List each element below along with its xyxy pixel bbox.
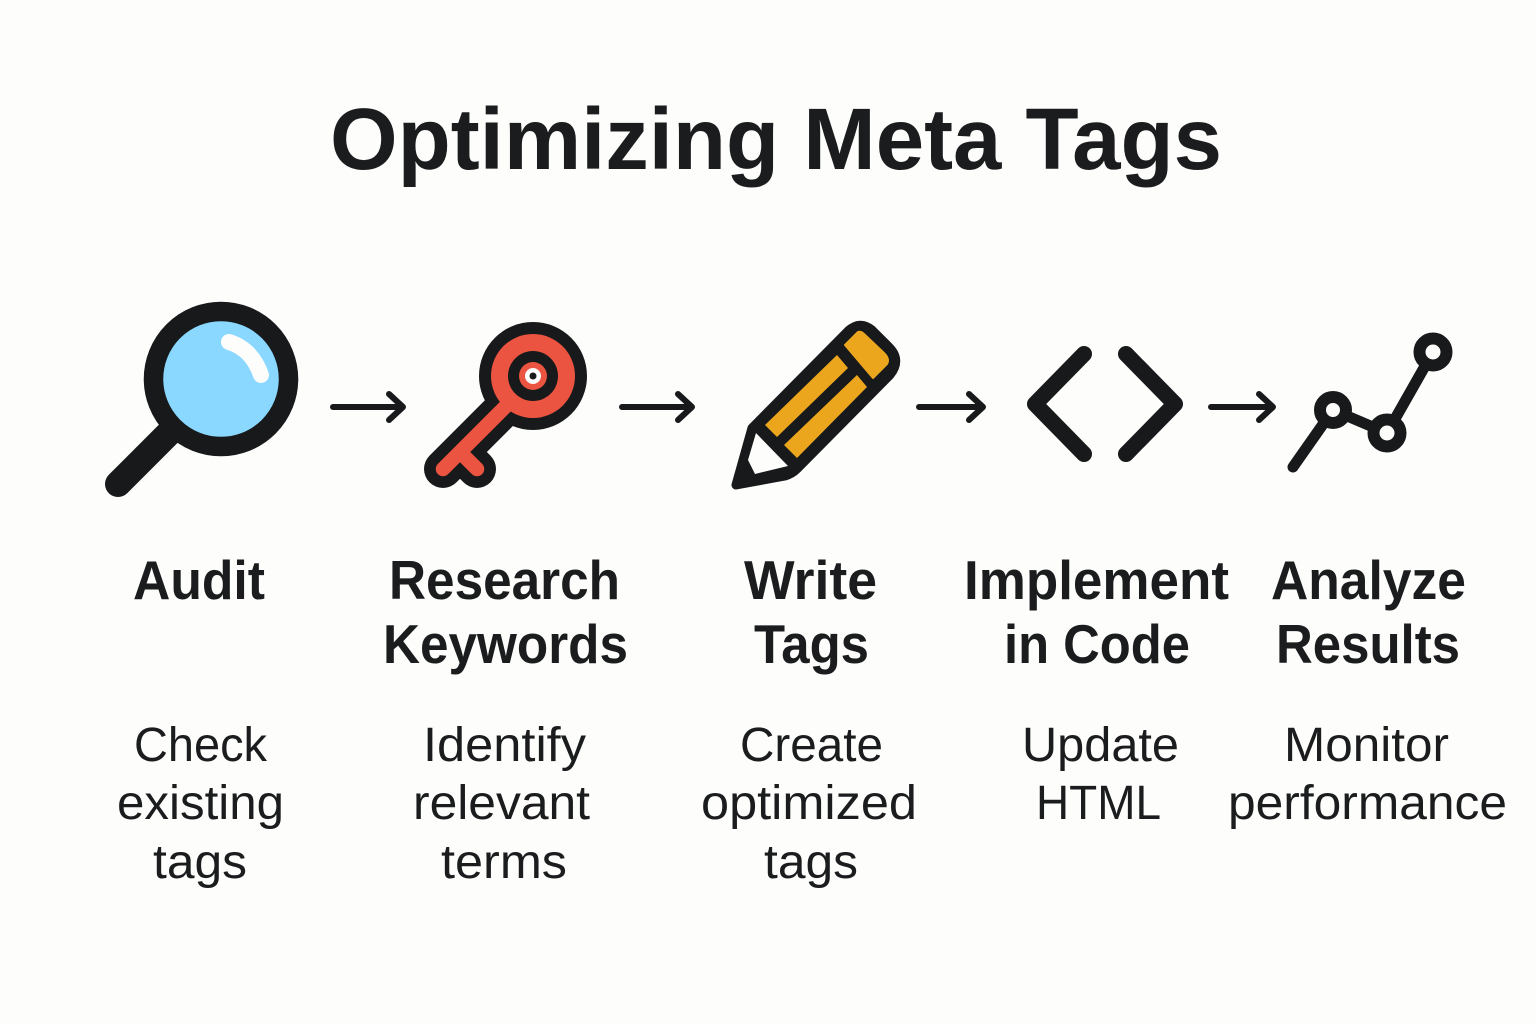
icon: line chart bbox=[1293, 338, 1446, 467]
description: Check existing tags bbox=[117, 719, 284, 889]
step 5: Analyze Results bbox=[1228, 550, 1507, 830]
description: Check existing tags: tags bbox=[153, 836, 247, 889]
arrow: write to implement bbox=[919, 394, 983, 420]
heading: Implement in Code: in Code bbox=[1004, 614, 1190, 675]
heading: Write Tags bbox=[744, 550, 877, 675]
icon: code brackets bbox=[1035, 354, 1175, 454]
heading: Analyze Results bbox=[1271, 550, 1466, 675]
heading: Analyze Results: Results bbox=[1276, 614, 1460, 675]
description: Identify relevant terms: terms bbox=[441, 836, 567, 889]
step 3: Write Tags bbox=[701, 550, 917, 889]
description: Update HTML: HTML bbox=[1036, 777, 1161, 830]
heading: Write Tags: Tags bbox=[754, 614, 869, 675]
description: Create optimized tags: optimized bbox=[701, 777, 917, 830]
description: Monitor performance bbox=[1228, 719, 1507, 830]
description: Create optimized tags: tags bbox=[764, 836, 858, 889]
arrow: implement to analyze bbox=[1211, 394, 1273, 420]
description: Identify relevant terms: Identify bbox=[423, 719, 586, 772]
description: Identify relevant terms: relevant bbox=[413, 777, 590, 830]
description: Create optimized tags: Create bbox=[740, 719, 883, 772]
step 2: Research Keywords bbox=[383, 550, 628, 889]
description: Identify relevant terms bbox=[413, 719, 590, 889]
heading: Write Tags: Write bbox=[744, 550, 877, 611]
description: Monitor performance: Monitor bbox=[1284, 719, 1449, 772]
description: Check existing tags: existing bbox=[117, 777, 284, 830]
description: Create optimized tags bbox=[701, 719, 917, 889]
description: Monitor performance: performance bbox=[1228, 777, 1507, 830]
step 4: Implement in Code bbox=[964, 550, 1229, 830]
step 1: Audit bbox=[117, 550, 284, 889]
heading: Research Keywords bbox=[383, 550, 628, 675]
heading: Analyze Results: Analyze bbox=[1271, 550, 1466, 611]
heading: Research Keywords: Research bbox=[389, 550, 620, 611]
icon: pencil bbox=[736, 325, 896, 485]
heading: Implement in Code bbox=[964, 550, 1229, 675]
description: Check existing tags: Check bbox=[134, 719, 268, 772]
heading: Implement in Code: Implement bbox=[964, 550, 1229, 611]
arrow: research to write bbox=[622, 394, 692, 420]
description: Update HTML: Update bbox=[1022, 719, 1179, 772]
heading: Audit: Audit bbox=[133, 550, 265, 611]
title: Optimizing Meta Tags bbox=[330, 91, 1222, 188]
icon: magnifying glass bbox=[118, 312, 288, 484]
description: Update HTML bbox=[1022, 719, 1179, 830]
icon: key bbox=[443, 322, 587, 469]
arrow: audit to research bbox=[333, 394, 403, 420]
heading: Research Keywords: Keywords bbox=[383, 614, 628, 675]
